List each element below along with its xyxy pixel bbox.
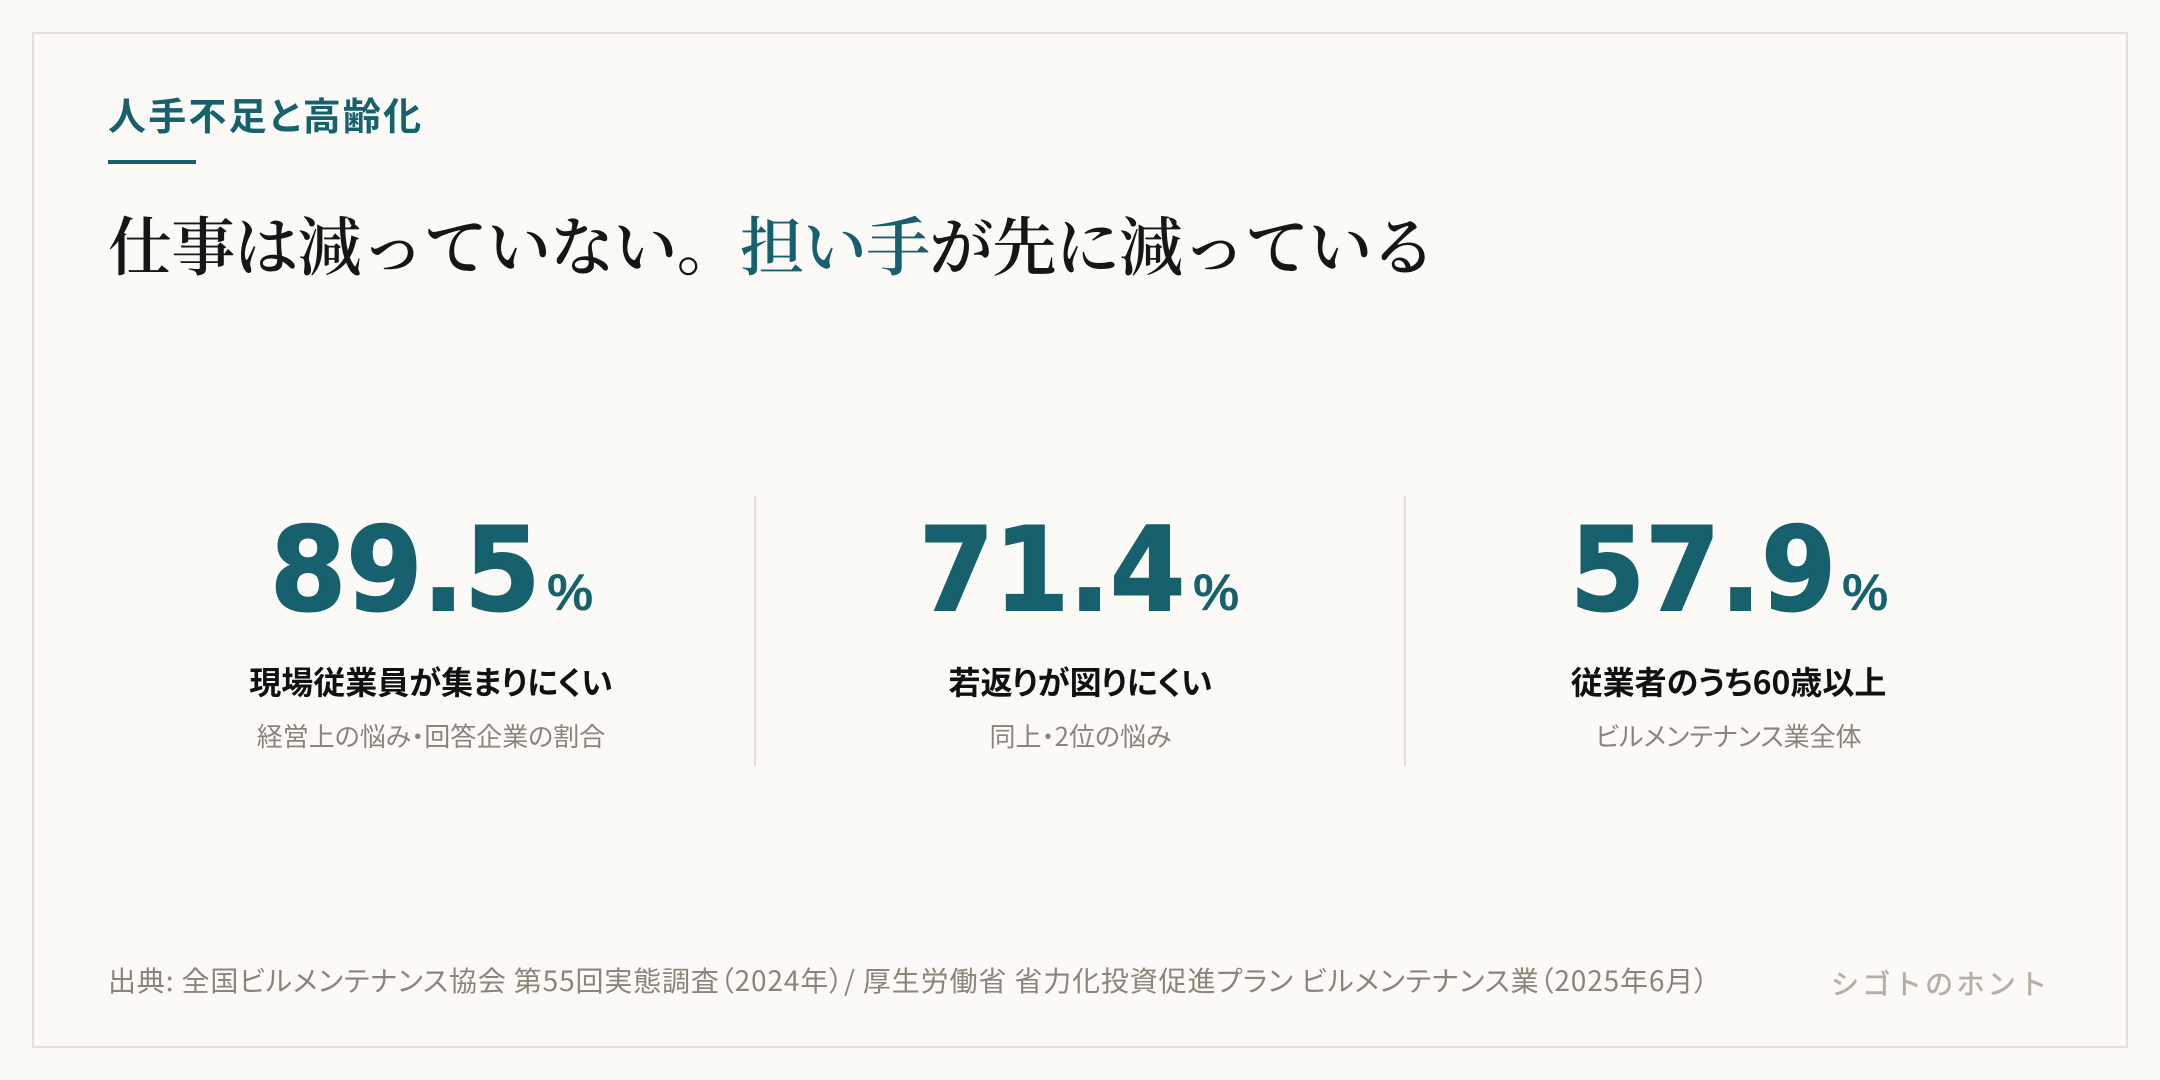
number: 71.4%: % <box>1193 564 1239 622</box>
brand name: シゴトのホント <box>1831 963 2051 1003</box>
panel: stat 3 <box>1570 503 1888 754</box>
kicker underline <box>108 160 196 164</box>
main headline: 仕事は減っていない。担い手が先に減っている <box>108 213 1435 284</box>
number: 89.5%: 89.5 <box>270 503 540 638</box>
panel: stat 2 <box>919 503 1239 754</box>
label: stat 1: 現場従業員が集まりにくい <box>249 658 613 704</box>
number: 89.5%: % <box>547 564 593 622</box>
number: 57.9%: 57.9 <box>1570 503 1836 638</box>
source footnote: 出典: 全国ビルメンテナンス協会 第55回実態調査（2024年）/ 厚生労働省 省力化投資促進プラン ビルメンテナンス業（2025年6月） <box>108 960 1709 1000</box>
label: stat 2: 若返りが図りにくい <box>948 658 1213 704</box>
column divider 1 <box>754 496 756 766</box>
note: stat 2: 同上・2位の悩み <box>990 717 1171 754</box>
column divider 2 <box>1404 496 1406 766</box>
label: stat 3: 従業者のうち60歳以上 <box>1571 658 1886 704</box>
kicker heading: 人手不足と高齢化 <box>108 86 423 141</box>
note: stat 3: ビルメンテナンス業全体 <box>1595 717 1862 754</box>
number: 71.4%: 71.4 <box>919 503 1185 638</box>
number: 57.9%: % <box>1842 564 1888 622</box>
note: stat 1: 経営上の悩み・回答企業の割合 <box>257 717 605 754</box>
panel: stat 1 <box>249 503 613 754</box>
